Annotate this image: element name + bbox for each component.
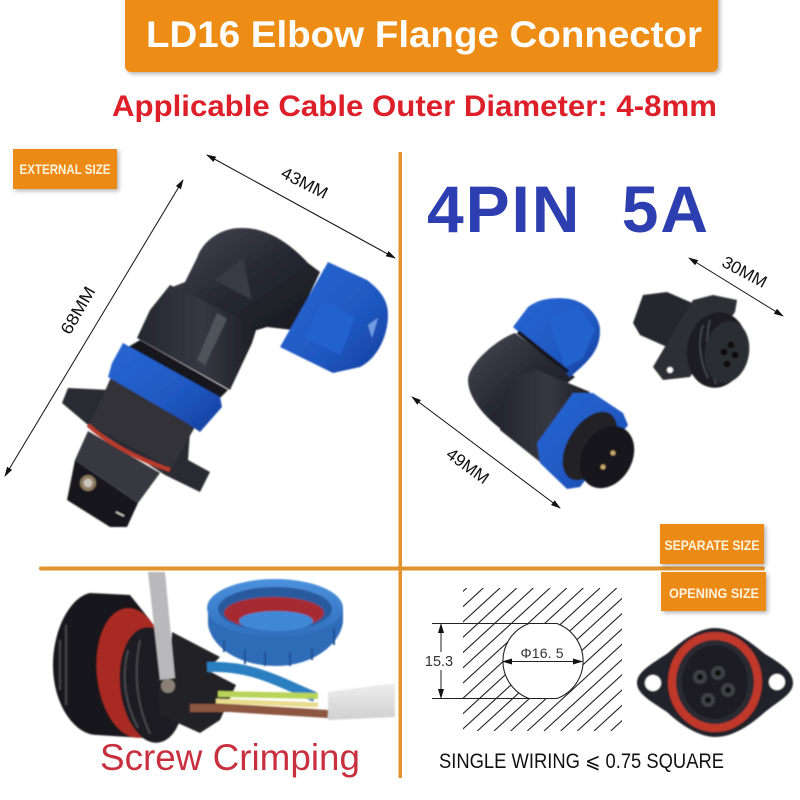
label: separate size: SEPARATE SIZE [664,537,760,553]
dimension: diameter [503,645,582,662]
connector rear [53,593,150,738]
title banner [125,0,718,72]
blue lock ring [537,393,628,489]
arrow: 49mm [412,397,560,508]
hole outline [503,624,583,698]
photo: flange opening view [637,628,793,737]
stem [75,431,160,503]
arrow: 43mm [207,155,395,258]
plug opening [551,402,629,490]
arrow: 30mm: 30MM [719,252,770,292]
subtitle: cable diameter: Applicable Cable Outer Diameter: 4-8mm [112,90,717,123]
flange plate [653,295,737,380]
title banner: LD16 Elbow Flange Connector [146,14,702,55]
blue lock ring [108,343,222,432]
rear terminals [633,292,697,352]
plug face [569,416,645,498]
label: opening size [661,572,766,611]
dimension: flat width [424,624,530,698]
hatched cut-out diagram [426,588,622,731]
label: external size [13,149,117,189]
blue gland [513,298,600,377]
hex body [137,285,257,390]
arrow: 68mm: 68MM [57,283,99,338]
arrow: 68mm [5,180,183,476]
flange body [90,375,196,468]
photo: assembled elbow connector [62,228,388,527]
photo: elbow plug [468,298,645,498]
neck [128,340,228,398]
caption: screw crimping: Screw Crimping [100,737,360,778]
blue wire [207,667,315,697]
black collar [518,332,568,372]
panel: opening size [426,572,794,772]
caption: single wiring: SINGLE WIRING ⩽ 0.75 SQUARE [439,750,724,773]
divider: vertical [398,152,402,778]
red seal ring [88,425,170,470]
dimension: flat width: 15.3 [425,654,453,670]
blue cable gland [280,262,388,373]
arrow: 43mm: 43MM [278,163,331,203]
terminal block [158,632,236,733]
label: opening size: OPENING SIZE [669,585,759,601]
heading: 4PIN 5A: 4PIN 5A [427,172,708,246]
photo: crimping [53,572,395,746]
panel: screw crimping [53,572,395,778]
brown wire [190,708,328,714]
panel: separate size [412,252,783,564]
grey sheath [328,683,395,720]
red seal [90,605,176,741]
arrow: 30mm [689,252,783,316]
hex body [500,370,590,462]
label: external size: EXTERNAL SIZE [20,161,110,177]
threaded front [114,624,190,746]
label: separate size [660,524,764,564]
mounting flange [62,388,210,492]
divider: horizontal [39,566,765,570]
elbow housing [468,333,575,432]
blue cap [207,579,343,666]
arrow: 49mm: 49MM [443,444,493,488]
screwdriver [148,572,175,693]
elbow housing [170,228,320,330]
dimension: diameter: Φ16. 5 [520,645,564,661]
photo: flange socket [633,292,754,393]
plug end [67,460,138,527]
panel: external size [5,149,395,527]
green yellow wire [218,694,318,696]
threaded socket [681,307,754,393]
